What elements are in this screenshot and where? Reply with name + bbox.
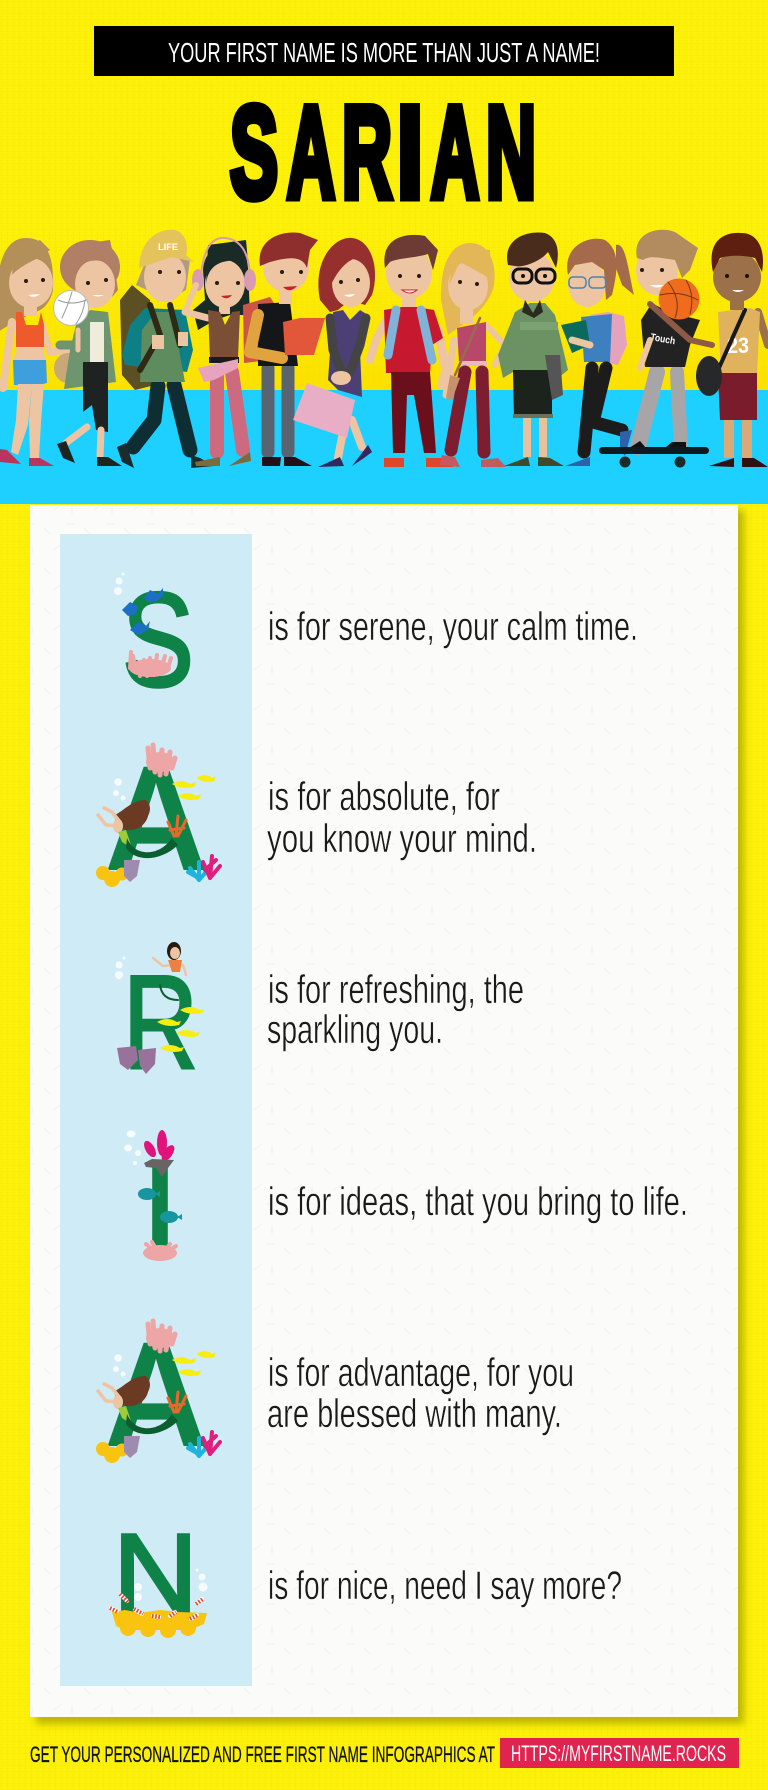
letter I illustration with fountain: I — [145, 1142, 175, 1272]
person 4: girl with pink headphones — [185, 238, 256, 466]
blue coral — [188, 862, 206, 880]
line: A — [267, 775, 537, 861]
yellow fish — [172, 775, 216, 800]
letter S illustration: S — [122, 566, 194, 715]
person 12: boy in yellow basketball jersey — [696, 233, 768, 467]
person 6: girl with pink case — [293, 238, 375, 467]
bubbles — [113, 778, 126, 800]
person 3: boy with cap and backpack: LIFE — [158, 242, 178, 252]
line: N: is for nice, need I say more? — [268, 1564, 622, 1608]
title: SARIAN: A — [287, 79, 335, 225]
bubbles — [114, 572, 124, 595]
person 7: boy in red shirt with blue straps — [370, 235, 454, 467]
mermaid — [98, 800, 178, 858]
pink coral crown — [146, 1321, 175, 1351]
teal fish — [138, 1188, 182, 1223]
yellow coral — [96, 1442, 128, 1463]
line: R: sparkling you. — [267, 1008, 443, 1052]
purple corals — [117, 1046, 156, 1074]
letter A illustration with mermaid: A — [104, 734, 208, 902]
line: R: is for refreshing, the — [268, 968, 524, 1012]
title: SARIAN — [230, 79, 536, 225]
person 1: girl in orange top — [0, 238, 72, 466]
pale blue letter column — [60, 534, 252, 1686]
yellow fish — [172, 1351, 216, 1376]
illustration: group of twelve students — [0, 230, 768, 468]
mermaid — [98, 1376, 178, 1434]
person 10: girl with ponytail and tablet — [561, 239, 634, 466]
person 5: boy with open book — [243, 232, 325, 466]
bubbles — [124, 1130, 141, 1165]
top banner — [94, 26, 674, 76]
title: SARIAN: S — [230, 79, 278, 225]
title: SARIAN: R — [342, 79, 392, 225]
orange coral — [168, 816, 186, 836]
title: SARIAN: A — [431, 79, 479, 225]
line: R — [267, 968, 524, 1052]
title: SARIAN: I — [397, 79, 423, 225]
letter N illustration: N — [113, 1511, 198, 1636]
blue coral — [188, 1438, 206, 1456]
letter I illustration with fountain — [124, 1130, 182, 1272]
bubbles — [115, 956, 126, 979]
title: SARIAN: N — [486, 79, 536, 225]
person 2: girl with volleyball and green jacket — [54, 240, 122, 466]
purple coral — [124, 860, 140, 882]
footer call to action: GET YOUR PERSONALIZED AND FREE FIRST NAME INFOGRAPHICS AT — [30, 1742, 495, 1767]
bubbles — [113, 1354, 126, 1376]
yellow fish — [157, 1007, 204, 1052]
person 9: boy with glasses and green sweater — [498, 232, 568, 466]
line: A second — [267, 1351, 574, 1436]
blue fish — [122, 588, 163, 635]
person 11: skater with basketball — [599, 230, 712, 468]
person 3: boy with cap and backpack — [117, 230, 214, 468]
line: S: is for serene, your calm time. — [268, 605, 638, 649]
orange coral — [168, 1392, 186, 1412]
pink coral crown — [146, 745, 175, 775]
seated mermaid — [153, 942, 186, 975]
pink coral — [129, 652, 171, 677]
letter R illustration with mermaid: R — [123, 949, 198, 1097]
magenta coral — [203, 856, 220, 878]
line: A second: is for advantage, for you — [268, 1351, 574, 1395]
counter loop tail — [160, 985, 178, 1000]
purple coral — [124, 1436, 140, 1458]
magenta coral — [203, 1432, 220, 1454]
line: A: is for absolute, for — [268, 775, 500, 819]
yellow coral bed — [112, 1610, 207, 1638]
yellow coral — [96, 866, 128, 887]
line: A second: are blessed with many. — [267, 1392, 562, 1436]
magenta fountain — [142, 1130, 177, 1163]
descriptions — [267, 605, 688, 1608]
bubbles — [134, 1568, 208, 1601]
pink coral — [143, 1242, 177, 1261]
person 11: skater with basketball: Touch — [649, 332, 676, 347]
white content panel — [30, 505, 744, 1724]
person 8: blonde girl — [440, 243, 506, 467]
clownfish — [110, 1594, 203, 1619]
rock — [144, 1159, 174, 1177]
second letter A illustration with mermaid: A — [104, 1310, 208, 1478]
person 12: boy in yellow basketball jersey: 23 — [727, 333, 749, 358]
blue floor band — [0, 390, 768, 504]
line: A: you know your mind. — [267, 817, 537, 861]
